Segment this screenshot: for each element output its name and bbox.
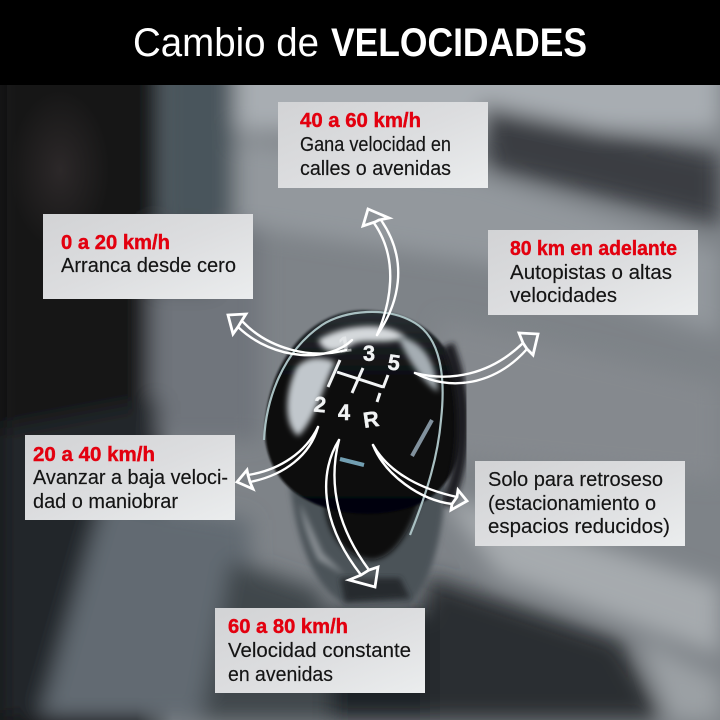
panel: 0 a 20 km/h <box>43 214 253 299</box>
panel: 60 a 80 km/h: en avenidas <box>228 664 333 686</box>
panel: 20 a 40 km/h <box>25 435 235 520</box>
panel: 60 a 80 km/h <box>215 608 425 693</box>
panel: solo para retroceso: espacios reducidos) <box>488 516 670 538</box>
panel: solo para retroceso: Solo para retroseso <box>488 469 663 491</box>
title bar <box>0 0 720 85</box>
gear numbers and shift pattern <box>313 331 402 433</box>
arrow: gear R to solo para retroceso <box>373 445 467 510</box>
gear numbers and shift pattern: 5 <box>386 349 402 376</box>
title: VELOCIDADES <box>331 21 587 65</box>
panel: solo para retroceso <box>475 461 685 546</box>
arrow: gear 4 to 60 a 80 km/h <box>326 440 378 587</box>
knob reflections <box>318 326 405 351</box>
gear numbers and shift pattern: 3 <box>363 341 375 366</box>
panel: 40 a 60 km/h: calles o avenidas <box>300 158 451 180</box>
gear numbers and shift pattern: 4 <box>338 400 351 425</box>
gear numbers and shift pattern: R <box>361 406 381 433</box>
panel: 60 a 80 km/h: Velocidad constante <box>228 640 411 662</box>
panel: 0 a 20 km/h: 0 a 20 km/h <box>61 232 170 254</box>
panel: 60 a 80 km/h: 60 a 80 km/h <box>228 616 348 638</box>
title: Cambio de <box>133 21 319 65</box>
panel: 20 a 40 km/h: dad o maniobrar <box>33 491 178 513</box>
arrow: gear 3 to 40 a 60 km/h <box>363 209 398 335</box>
panel: 80 km en adelante: 80 km en adelante <box>510 238 677 260</box>
arrow: gear 2 to 20 a 40 km/h <box>237 427 318 489</box>
gear numbers and shift pattern: 1 <box>337 331 353 358</box>
panel: solo para retroceso: (estacionamiento o <box>488 493 656 515</box>
gear numbers and shift pattern: 2 <box>313 391 327 418</box>
panel: 40 a 60 km/h: Gana velocidad en <box>300 134 451 156</box>
panel: 80 km en adelante <box>488 230 698 315</box>
panel: 80 km en adelante: Autopistas o altas <box>510 262 672 284</box>
panel: 20 a 40 km/h: Avanzar a baja veloci- <box>33 467 228 489</box>
panel: 40 a 60 km/h <box>278 102 488 188</box>
panel: 0 a 20 km/h: Arranca desde cero <box>61 255 236 277</box>
gear knob <box>264 310 464 604</box>
panel: 80 km en adelante: velocidades <box>510 285 617 307</box>
arrow: gear 5 to 80 km en adelante <box>415 333 538 383</box>
knob lower stem <box>290 485 446 604</box>
panel: 20 a 40 km/h: 20 a 40 km/h <box>33 444 155 466</box>
arrow: gear 1 to 0 a 20 km/h <box>228 314 352 355</box>
panel: 40 a 60 km/h: 40 a 60 km/h <box>300 110 421 132</box>
knob body <box>265 310 464 514</box>
